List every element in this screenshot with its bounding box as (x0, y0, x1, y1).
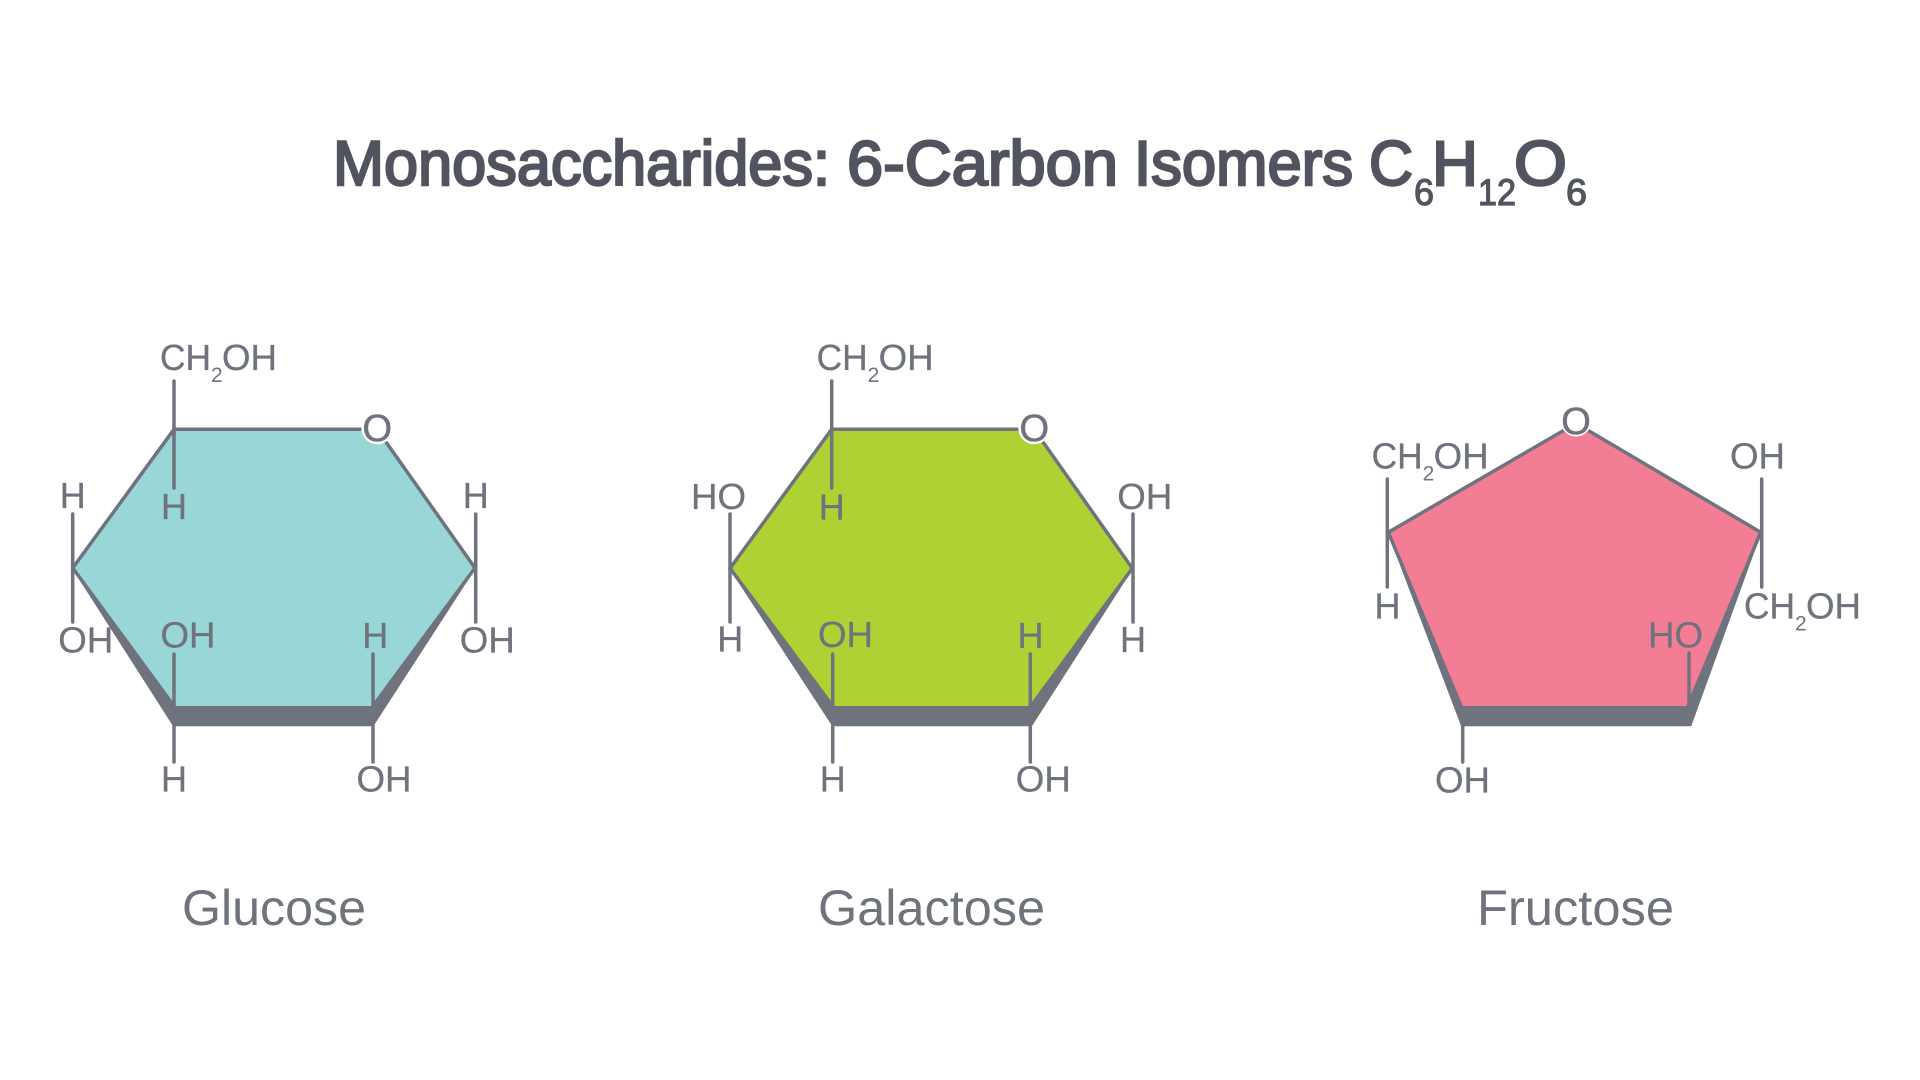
galactose name: Galactose (818, 880, 1045, 936)
panel: fructose (1372, 401, 1861, 936)
fructose labels: OH (1730, 435, 1785, 476)
galactose labels: OH (818, 614, 873, 655)
glucose labels: OH (460, 620, 515, 661)
galactose bonds (730, 381, 1133, 762)
fructose ring (1388, 406, 1761, 726)
glucose ring (73, 412, 475, 726)
galactose labels: H (1120, 619, 1146, 660)
glucose labels: 2 (211, 364, 223, 387)
fructose labels: OH (1435, 759, 1490, 800)
fructose labels: CH (1372, 435, 1423, 476)
fructose bonds (1387, 479, 1762, 762)
glucose labels: H (362, 615, 388, 656)
title: 6 (1414, 172, 1434, 213)
panel: glucose (58, 337, 515, 936)
galactose labels: OH (879, 337, 934, 378)
title: 6 (1566, 172, 1587, 213)
title: C (1369, 129, 1413, 199)
fructose name: Fructose (1477, 880, 1674, 936)
title: 12 (1478, 172, 1516, 213)
glucose labels: CH (160, 337, 211, 378)
fructose labels (1372, 401, 1861, 800)
fructose labels: HO (1648, 614, 1703, 655)
galactose labels: CH (817, 337, 868, 378)
galactose labels: O (1020, 408, 1049, 450)
glucose labels: H (161, 486, 187, 527)
fructose labels: OH (1434, 435, 1489, 476)
galactose labels: HO (691, 476, 746, 517)
title: Isomers (1134, 129, 1353, 199)
glucose bonds (73, 381, 476, 762)
galactose labels: H (820, 759, 846, 800)
glucose labels: H (60, 475, 86, 516)
title: 6-Carbon (847, 129, 1118, 199)
glucose labels: OH (222, 337, 277, 378)
galactose labels: OH (1016, 759, 1071, 800)
title: Monosaccharides: (333, 129, 830, 199)
fructose labels: CH (1744, 585, 1795, 626)
galactose ring (730, 412, 1132, 726)
glucose labels: H (463, 475, 489, 516)
fructose labels: 2 (1795, 612, 1807, 635)
glucose labels: OH (356, 759, 412, 800)
galactose labels: H (717, 619, 743, 660)
galactose labels (691, 337, 1172, 800)
glucose labels: OH (58, 620, 113, 661)
glucose labels: OH (160, 615, 216, 656)
glucose labels (58, 337, 515, 800)
galactose labels: 2 (868, 364, 879, 387)
title: O (1514, 129, 1567, 199)
title: H (1432, 129, 1478, 199)
fructose labels: O (1561, 401, 1591, 443)
fructose labels: H (1374, 585, 1400, 626)
title (333, 129, 1587, 213)
fructose labels: 2 (1423, 462, 1434, 485)
glucose name: Glucose (182, 880, 366, 936)
fructose labels: OH (1806, 585, 1861, 626)
panel: galactose (691, 337, 1172, 936)
glucose labels: O (363, 408, 392, 450)
galactose labels: H (819, 486, 845, 527)
galactose labels: OH (1117, 476, 1172, 517)
galactose labels: H (1018, 615, 1044, 656)
glucose labels: H (161, 759, 187, 800)
